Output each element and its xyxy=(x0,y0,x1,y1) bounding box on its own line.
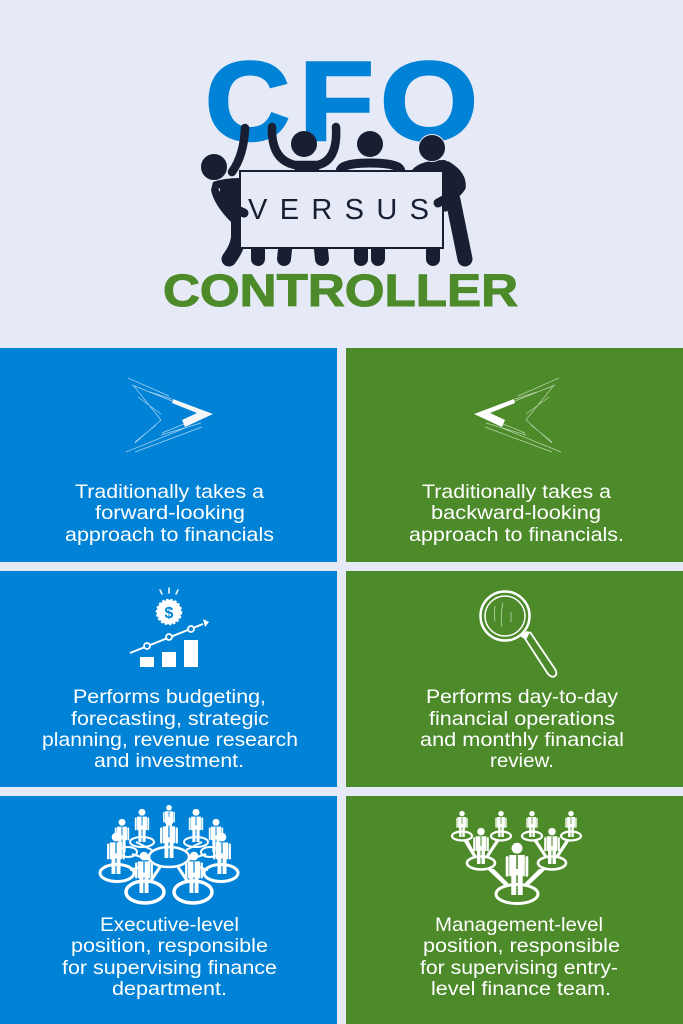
text block: Performs budgeting, xyxy=(73,686,266,708)
text block xyxy=(420,914,620,1000)
text block: Performs day-to-day xyxy=(426,686,618,708)
text block: approach to financials. xyxy=(409,524,624,546)
text block: for supervising entry- xyxy=(420,957,618,979)
icon: magnifying glass xyxy=(480,592,556,677)
icon: forward arrow xyxy=(126,378,213,452)
figure 4 xyxy=(412,134,461,212)
panel: CFO duties xyxy=(0,571,337,787)
illustration: four figures holding a versus sign xyxy=(200,127,465,259)
icon: growth chart with dollar badge xyxy=(130,588,209,667)
panel: Controller duties xyxy=(346,571,683,787)
text block: planning, revenue research xyxy=(42,729,298,751)
title: CFO: O xyxy=(380,39,478,164)
text block: level finance team. xyxy=(431,978,611,1000)
text block: approach to financials xyxy=(65,524,274,546)
panel: CFO level xyxy=(0,796,337,1024)
figure 3 xyxy=(340,131,401,179)
panel: Controller outlook xyxy=(346,348,683,562)
text block xyxy=(409,481,624,546)
icon: backward arrow xyxy=(474,378,561,452)
text block: financial operations xyxy=(429,708,615,730)
text block: backward-looking xyxy=(431,502,601,524)
text block: department. xyxy=(112,978,227,1000)
title: CFO: F xyxy=(299,39,374,164)
panel: CFO outlook xyxy=(0,348,337,562)
text block: and monthly financial xyxy=(420,729,624,751)
text block: Management-level xyxy=(435,914,603,936)
panel: Controller level xyxy=(346,796,683,1024)
versus sign xyxy=(222,171,456,248)
figure 1 xyxy=(200,128,245,250)
text block xyxy=(65,481,274,546)
text block: Traditionally takes a xyxy=(75,481,264,503)
versus sign: VERSUS xyxy=(248,194,429,226)
icon: management hierarchy xyxy=(452,811,581,904)
figure legs xyxy=(229,200,465,259)
text block: forecasting, strategic xyxy=(71,708,269,730)
text block: and investment. xyxy=(94,750,244,772)
figure 2 xyxy=(272,127,336,172)
text block: position, responsible xyxy=(71,935,268,957)
text block xyxy=(62,914,277,1000)
text block: position, responsible xyxy=(423,935,620,957)
text block: Executive-level xyxy=(100,914,239,936)
title: CFO xyxy=(205,39,478,164)
text block: for supervising finance xyxy=(62,957,277,979)
text block: Traditionally takes a xyxy=(422,481,611,503)
icon: growth chart with dollar badge: $ xyxy=(165,605,174,622)
text block xyxy=(42,686,298,772)
text block: review. xyxy=(490,750,554,772)
icon: executive network xyxy=(100,805,238,903)
title: CFO: C xyxy=(205,39,290,164)
title: CONTROLLER: CONTROLLER xyxy=(163,265,518,316)
text block xyxy=(420,686,624,772)
text block: forward-looking xyxy=(95,502,245,524)
